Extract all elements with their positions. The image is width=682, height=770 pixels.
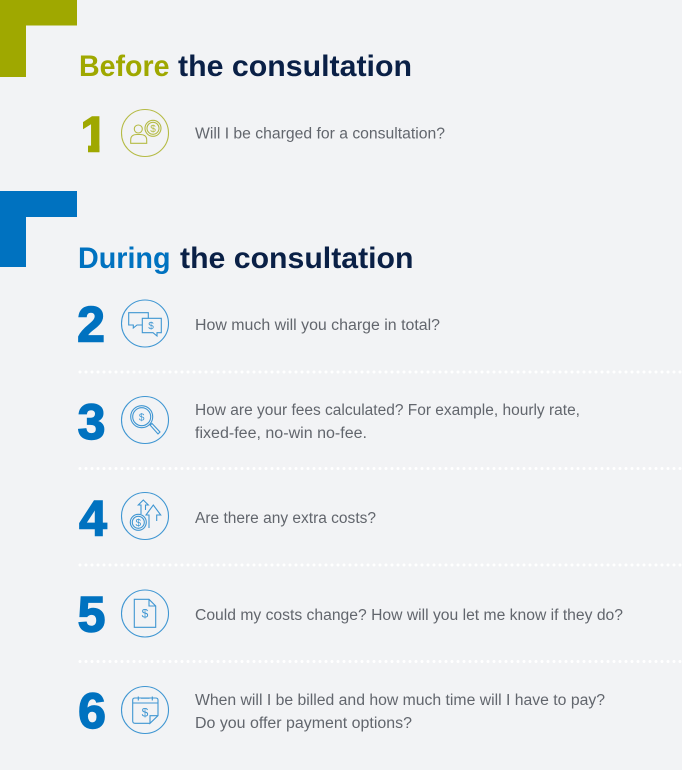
question 1: Will I be charged for a consultation? [195, 126, 445, 142]
number 4: 4 [79, 490, 107, 546]
corner marker: green [0, 0, 77, 77]
heading: during the consultation: During [78, 242, 170, 275]
number 2: 2 [77, 296, 105, 352]
number 3: 3 [78, 394, 105, 450]
number 6: 6 [78, 683, 106, 739]
icon: speech bubbles with dollar: $ [148, 321, 154, 332]
item 1 [83, 109, 444, 157]
icon: document with dollar [122, 590, 168, 637]
icon: document with dollar: $ [142, 606, 149, 620]
heading: before the consultation: the consultation [178, 50, 412, 83]
icon: magnifier with dollar [122, 396, 168, 444]
item 4 [79, 490, 376, 546]
icon: coin and rising arrows: $ [136, 518, 142, 529]
item 3 [78, 394, 580, 450]
icon: person with dollar coin [122, 110, 168, 156]
question 3 [195, 402, 580, 442]
question 4: Are there any extra costs? [195, 510, 376, 527]
question 2: How much will you charge in total? [195, 317, 440, 334]
item 2 [77, 296, 440, 352]
question 5: Could my costs change? How will you let me know if they do? [195, 607, 623, 624]
icon: calendar with dollar: $ [142, 706, 149, 720]
question 3: How are your fees calculated? For example, hourly rate, [195, 402, 580, 419]
item 5 [78, 586, 623, 642]
question 3: fixed-fee, no-win no-fee. [195, 425, 367, 442]
question 6: When will I be billed and how much time will I have to pay? [195, 692, 605, 709]
icon: speech bubbles with dollar [122, 300, 168, 347]
number 5: 5 [78, 586, 105, 642]
icon: coin and rising arrows [122, 492, 168, 540]
icon: magnifier with dollar: $ [139, 412, 145, 424]
number 1: 1 [80, 106, 108, 162]
question 6: Do you offer payment options? [195, 715, 412, 732]
heading: during the consultation: the consultation [180, 242, 414, 275]
heading: before the consultation [79, 50, 412, 83]
corner marker: blue [0, 191, 77, 267]
icon: person with dollar coin: $ [150, 124, 156, 135]
item 6 [78, 683, 605, 739]
question 6 [195, 692, 605, 732]
icon: calendar with dollar [122, 686, 168, 734]
heading: during the consultation [78, 242, 414, 275]
heading: before the consultation: Before [79, 50, 170, 83]
